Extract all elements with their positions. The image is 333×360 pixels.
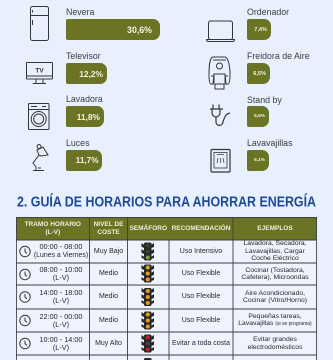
bar: Freidora de Aire: 6,5% — [253, 70, 266, 76]
icon: desk lamp — [32, 144, 49, 171]
row 1: examples: Lavadora, Secadora, — [243, 240, 307, 247]
row 1: examples: Coche Eléctrico — [251, 255, 299, 262]
row 2: examples — [241, 267, 309, 281]
row 4: time: (L-V) — [53, 320, 69, 328]
table header: tramo horario: TRAMO HORARIO — [25, 221, 81, 228]
traffic light: row 3 amber — [142, 288, 154, 306]
row 4: cost: Medio — [99, 317, 118, 324]
row 3: examples: Cocinar (Vitro/Horno) — [243, 297, 307, 304]
icon: fridge — [30, 6, 49, 41]
row 4: examples: Pequeñas tareas, — [248, 313, 302, 320]
row 2: recommendation: Uso Flexible — [182, 270, 220, 277]
label: Lavavajillas: Lavavajillas — [247, 138, 292, 148]
bar: Luces — [66, 150, 102, 171]
icon: television: TV — [35, 68, 44, 74]
table header: recomendación — [169, 217, 233, 240]
row 3: time: (L-V) — [53, 296, 69, 305]
traffic light: row 5 red — [142, 334, 154, 352]
row 4: recommendation: Uso Flexible — [182, 317, 220, 324]
bar: Lavavajillas: 6,1% — [254, 158, 265, 163]
row 1: examples: Lavavajillas, Cargar — [245, 248, 305, 255]
row 5: examples: electrodomésticos — [248, 344, 302, 350]
label: Lavadora: Lavadora — [66, 94, 103, 104]
icon: television — [26, 62, 53, 84]
row 4: examples — [238, 313, 312, 327]
bar: Lavadora: 11,8% — [77, 112, 100, 122]
icon: dishwasher — [210, 148, 231, 173]
table header: ejemplos: EJEMPLOS — [257, 225, 293, 232]
row 3: recommendation: Uso Flexible — [182, 293, 220, 300]
table header: recomendación: RECOMENDACIÓN — [172, 225, 230, 232]
bar: Nevera — [66, 19, 160, 40]
label: Luces: Luces — [66, 138, 89, 148]
traffic light: row 4 amber — [142, 312, 154, 330]
table header: semáforo — [128, 217, 169, 240]
row 4: time: 22:00 - 00:00 — [39, 312, 82, 321]
row 3: examples: Aire Acondicionado, — [245, 290, 305, 297]
icons: clocks — [20, 246, 30, 349]
bar: Nevera: 30,6% — [127, 24, 152, 34]
table header: nivel de coste — [90, 217, 128, 240]
panel: appliance consumption — [26, 6, 310, 173]
bar: Stand by: 6,6% — [254, 114, 265, 119]
table header: tramo horario — [16, 217, 90, 240]
table: schedule guide — [16, 217, 317, 360]
table header: ejemplos — [233, 217, 317, 240]
traffic light: row 2 amber — [142, 264, 154, 282]
row 4: time — [39, 312, 82, 328]
row 5: time: (L-V) — [53, 342, 69, 352]
row 1: time: 00:00 - 08:00 — [39, 242, 82, 251]
table header: nivel de coste: NIVEL DE — [94, 221, 123, 228]
bar: Stand by — [247, 106, 269, 127]
icon: laptop — [206, 20, 235, 42]
traffic light: row 6 — [144, 358, 152, 360]
table header: tramo horario: (L-V) — [45, 228, 60, 236]
bar: Televisor — [66, 63, 107, 84]
row 2: examples: Cafetera), Microondas — [241, 274, 309, 281]
row 1: examples — [243, 240, 307, 262]
table header: semáforo: SEMÁFORO — [129, 225, 167, 232]
row 5: examples — [248, 336, 302, 350]
bar: Televisor: 12,2% — [79, 68, 103, 78]
bar: Ordenador — [247, 19, 271, 40]
bar: Luces: 11,7% — [76, 156, 98, 165]
table header: nivel de coste: COSTE — [97, 228, 120, 236]
row 5: examples: Evitar grandes — [253, 336, 297, 343]
icon: air fryer — [208, 56, 230, 90]
label: Nevera: Nevera — [66, 7, 94, 17]
row 5: recommendation: Evitar a toda costa — [172, 340, 230, 347]
row 2: time — [39, 265, 82, 282]
label: Stand by: Stand by — [247, 95, 282, 105]
bar: Lavadora — [66, 106, 104, 127]
row 4: examples: Lavavajillas (si se programa) — [238, 320, 312, 327]
row 1: time: (Lunes a Viernes) — [34, 252, 88, 259]
row 2: time: 08:00 - 10:00 — [39, 265, 82, 274]
row 3: time: 14:00 - 18:00 — [39, 288, 82, 297]
label: Ordenador: Ordenador — [247, 7, 289, 17]
traffic light: row 1 green — [142, 242, 154, 260]
row 3: time — [39, 288, 82, 305]
row 2: cost: Medio — [99, 270, 118, 277]
row 3: examples — [243, 290, 307, 304]
row 1: recommendation: Uso Intensivo — [180, 248, 222, 255]
row 1: cost: Muy Bajo — [94, 248, 123, 255]
bar: Lavavajillas — [247, 150, 269, 171]
bar: Ordenador: 7,4% — [254, 26, 267, 32]
row 3: cost: Medio — [99, 293, 118, 300]
row 5: time: 10:00 - 14:00 — [39, 335, 82, 344]
row 1: time — [34, 242, 88, 259]
label: Freidora de Aire: Freidora de Aire — [247, 51, 310, 61]
icon: washing machine — [28, 103, 50, 130]
label: Televisor: Televisor — [66, 51, 101, 61]
row 5: cost: Muy Alto — [95, 340, 122, 347]
table grid and icons — [16, 217, 317, 360]
row 2: time: (L-V) — [53, 273, 69, 282]
row 5: time — [39, 335, 82, 352]
row 2: examples: Cocinar (Tostadora, — [245, 267, 305, 274]
icon: plug — [210, 104, 230, 126]
bar: Freidora de Aire — [247, 63, 270, 84]
